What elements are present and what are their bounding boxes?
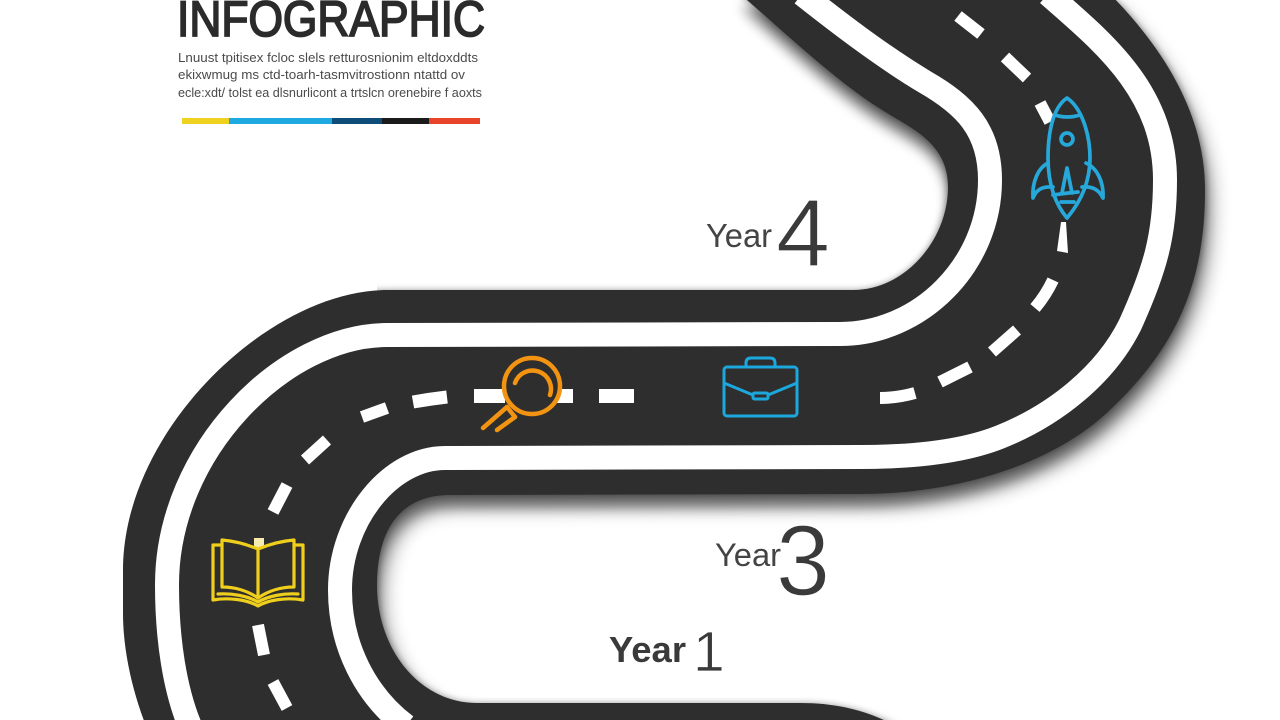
intro text: Lnuust tpitisex fcloc slels retturosnionim eltdoxddts (178, 50, 479, 65)
label: year 4 (706, 180, 830, 287)
label: year 4: Year (706, 217, 772, 254)
intro text: ekixwmug ms ctd-toarh-tasmvitrostionn ntattd ov (178, 67, 466, 82)
road edge line: inner (340, 0, 1165, 720)
colour bar (182, 118, 480, 124)
icon: rocket (1033, 98, 1103, 218)
label: year 3 (715, 505, 830, 617)
label: year 1 (609, 620, 725, 684)
label: year 4: 4 (776, 180, 830, 287)
label: year 3: Year (715, 537, 781, 573)
road shadow (377, 0, 1224, 720)
intro text (178, 50, 482, 100)
road edge line: outer (167, 0, 990, 720)
label: year 1: Year (609, 629, 686, 670)
label: year 3: 3 (776, 505, 830, 617)
icon: briefcase (724, 358, 797, 416)
icon: open book (213, 540, 303, 606)
intro text: ecle:xdt/ tolst ea dlsnurlicont a trtslcn orenebire f aoxts (178, 85, 482, 100)
label: year 1: 1 (693, 620, 725, 684)
icon: magnifier (483, 358, 560, 430)
road centre dashes (258, 16, 1053, 708)
